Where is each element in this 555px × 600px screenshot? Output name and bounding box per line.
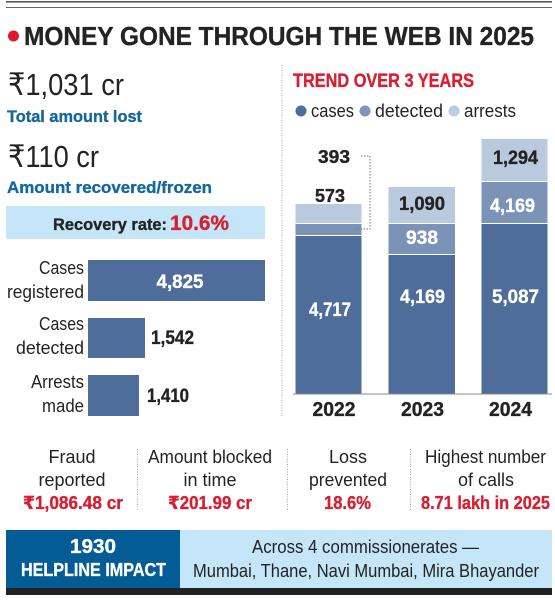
- bar chart: cases, detections, arrests: [7, 258, 265, 416]
- title: MONEY GONE THROUGH THE WEB IN 2025: [24, 21, 534, 51]
- stacked bar: 2023: 2023: [401, 399, 444, 421]
- stacked bar: 2022: 573: [315, 186, 345, 206]
- stat: amount recovered: ₹110 cr: [8, 139, 99, 174]
- stat: fraud reported: ₹1,086.48 cr: [23, 493, 123, 513]
- stat: amount blocked in time: ₹201.99 cr: [168, 493, 252, 513]
- chart legend: detected: [375, 101, 443, 121]
- stacked bar: 2024: 1,294: [493, 148, 538, 169]
- helpline label: 1930: [70, 536, 116, 558]
- recovery rate callout: [6, 206, 265, 239]
- bar: arrests made: Arrests: [31, 372, 84, 392]
- stacked bar: 2023: 1,090: [399, 194, 445, 215]
- helpline label: HELPLINE IMPACT: [21, 560, 166, 580]
- stacked bar: 2024: 5,087: [492, 287, 539, 308]
- stat: fraud reported: [23, 447, 123, 513]
- stacked bar: 2022: 2022: [312, 399, 356, 421]
- bar: cases registered: registered: [7, 282, 84, 302]
- stacked bar: 2024: [482, 139, 548, 421]
- helpline banner: [6, 530, 552, 595]
- stat: amount blocked in time: in time: [183, 470, 237, 490]
- stat: amount blocked in time: [148, 447, 272, 513]
- connector: 393 label to detected segment: [355, 156, 370, 229]
- stat: total amount lost: ₹1,031 cr: [8, 67, 124, 102]
- stat: loss prevented: 18.6%: [324, 493, 371, 513]
- chart legend: arrests: [464, 101, 516, 121]
- stacked bar: 2023: 4,169: [400, 287, 445, 308]
- stat: total amount lost: Total amount lost: [7, 107, 142, 126]
- stacked bar: 2022: [296, 147, 362, 421]
- chart legend: cases: [311, 101, 354, 121]
- chart legend: [296, 101, 516, 121]
- bar: cases detected: [16, 314, 194, 358]
- stat: fraud reported: Fraud: [48, 447, 96, 467]
- bar: cases detected: Cases: [39, 314, 84, 334]
- stat: highest number of calls: [421, 447, 550, 513]
- stat: amount recovered: Amount recovered/frozen: [7, 178, 212, 197]
- bar: arrests made: [31, 372, 189, 416]
- bar: cases detected: detected: [16, 338, 84, 358]
- helpline label: [6, 530, 180, 588]
- stat: total amount lost: [7, 67, 142, 126]
- stacked bar: 2023: [388, 187, 455, 421]
- stat: amount recovered: [7, 139, 212, 197]
- helpline coverage text: [193, 537, 539, 581]
- bar: arrests made: made: [42, 396, 84, 416]
- bar: cases registered: [7, 258, 265, 302]
- bar: cases registered: Cases: [39, 258, 84, 278]
- stat: loss prevented: prevented: [309, 470, 387, 490]
- stat: fraud reported: reported: [38, 470, 106, 490]
- bar: cases registered: 4,825: [156, 272, 204, 293]
- stacked bar: 2024: 2024: [489, 399, 533, 421]
- stat: loss prevented: Loss: [329, 447, 367, 467]
- helpline coverage text: Across 4 commissionerates —: [252, 537, 479, 557]
- stacked bar chart: trend: [293, 139, 552, 421]
- recovery rate callout: 10.6%: [170, 212, 229, 235]
- stat: highest number of calls: of calls: [458, 470, 514, 490]
- recovery rate callout: Recovery rate:: [53, 215, 167, 234]
- stat: highest number of calls: Highest number: [425, 447, 546, 467]
- stat: amount blocked in time: Amount blocked: [148, 447, 272, 467]
- stacked bar: 2023: 938: [406, 228, 438, 249]
- stacked bar: 2024: 4,169: [490, 196, 535, 217]
- bar: arrests made: 1,410: [147, 386, 189, 407]
- heading: trend over 3 years: TREND OVER 3 YEARS: [293, 71, 474, 92]
- stacked bar: 2022: 4,717: [309, 300, 351, 321]
- bar: cases detected: 1,542: [151, 328, 194, 349]
- stat: loss prevented: [309, 447, 387, 513]
- stacked bar: 2022: 393: [318, 147, 350, 167]
